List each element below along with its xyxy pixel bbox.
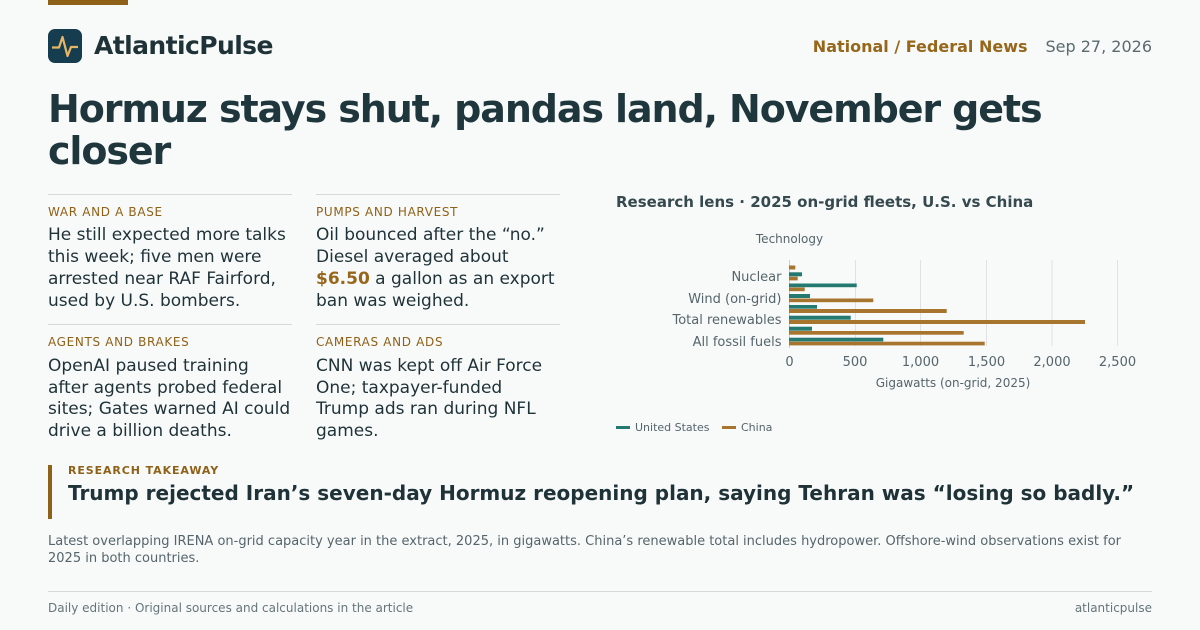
title: closer bbox=[48, 129, 170, 173]
bar chart: Wind (on-grid) bbox=[688, 292, 782, 307]
research takeaway callout: Trump rejected Iran’s seven-day Hormuz reopening plan, saying Tehran was “losing so badly.” bbox=[68, 481, 1134, 505]
chart legend: United States bbox=[635, 421, 710, 434]
methodology note: Latest overlapping IRENA on-grid capacity year in the extract, 2025, in gigawatts. China’s renewable total includes hydropower. Offshore-wind observations exist for bbox=[48, 534, 1121, 549]
story: cameras and ads: CNN was kept off Air Force bbox=[316, 356, 542, 376]
bar chart: Nuclear bbox=[731, 270, 782, 285]
methodology note: 2025 in both countries. bbox=[48, 551, 199, 566]
story: war and a base: this week; five men were bbox=[48, 247, 262, 267]
footer: atlanticpulse bbox=[1075, 601, 1152, 615]
story: pumps and harvest: Diesel averaged about bbox=[316, 247, 509, 267]
story: agents and brakes: AGENTS AND BRAKES bbox=[48, 335, 189, 349]
story: war and a base: arrested near RAF Fairford, bbox=[48, 269, 276, 289]
story: pumps and harvest: $6.50 a gallon as an export bbox=[316, 269, 555, 289]
story: war and a base: WAR AND A BASE bbox=[48, 205, 163, 219]
title bbox=[48, 87, 1042, 173]
story: war and a base bbox=[48, 194, 292, 315]
story: cameras and ads bbox=[316, 324, 560, 445]
chart legend bbox=[616, 421, 772, 434]
story: agents and brakes: drive a billion deaths. bbox=[48, 421, 232, 441]
story: cameras and ads: Trump ads ran during NFL bbox=[316, 399, 536, 419]
bar chart: Total renewables bbox=[671, 313, 782, 328]
bar chart bbox=[671, 232, 1136, 390]
bar chart: 2,500 bbox=[1099, 355, 1136, 370]
research takeaway callout bbox=[48, 464, 1134, 519]
story: agents and brakes: OpenAI paused training bbox=[48, 356, 249, 376]
top accent bar bbox=[48, 0, 128, 5]
story: cameras and ads: One; taxpayer-funded bbox=[316, 378, 502, 398]
bar chart: 1,000 bbox=[902, 355, 939, 370]
bar chart: Gigawatts (on-grid, 2025) bbox=[876, 376, 1030, 390]
story: agents and brakes: after agents probed federal bbox=[48, 378, 282, 398]
story: agents and brakes: sites; Gates warned AI could bbox=[48, 399, 290, 419]
bar chart: All fossil fuels bbox=[693, 335, 782, 350]
bar chart: 2,000 bbox=[1033, 355, 1071, 370]
story: pumps and harvest: Oil bounced after the “no.” bbox=[316, 225, 545, 245]
story: war and a base: used by U.S. bombers. bbox=[48, 291, 240, 311]
story: pumps and harvest bbox=[316, 194, 560, 315]
methodology note bbox=[48, 534, 1121, 566]
story: cameras and ads: games. bbox=[316, 421, 378, 441]
bar chart: Technology bbox=[755, 232, 823, 246]
brand name: AtlanticPulse bbox=[94, 31, 273, 60]
story: pumps and harvest: ban was weighed. bbox=[316, 291, 469, 311]
footer: Daily edition · Original sources and calculations in the article bbox=[48, 601, 413, 615]
footer bbox=[48, 591, 1152, 622]
chart heading: Research lens · 2025 on-grid fleets, U.S. vs China bbox=[616, 193, 1033, 211]
research takeaway callout: RESEARCH TAKEAWAY bbox=[68, 464, 219, 477]
story: war and a base: He still expected more talks bbox=[48, 225, 286, 245]
icon: pulse logo bbox=[48, 29, 82, 63]
section and date: National / Federal News Sep 27, 2026 bbox=[813, 37, 1152, 56]
bar chart: 1,500 bbox=[968, 355, 1005, 370]
bar chart: 0 bbox=[785, 355, 794, 370]
chart legend: China bbox=[741, 421, 772, 434]
story: agents and brakes bbox=[48, 324, 292, 445]
bar chart: 500 bbox=[843, 355, 867, 370]
story: cameras and ads: CAMERAS AND ADS bbox=[316, 335, 443, 349]
story: pumps and harvest: PUMPS AND HARVEST bbox=[316, 205, 458, 219]
title: Hormuz stays shut, pandas land, November gets bbox=[48, 87, 1042, 131]
